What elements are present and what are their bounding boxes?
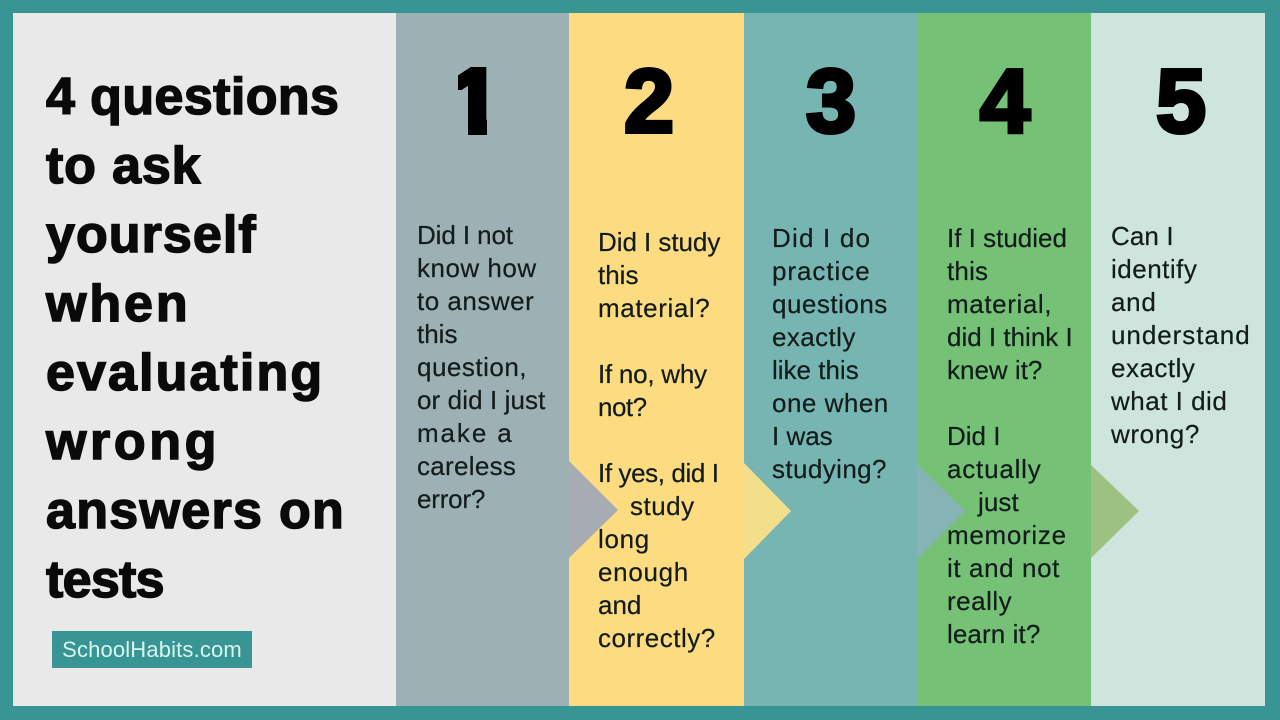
text: question 2: If no, why bbox=[598, 359, 707, 389]
text: question 4: actually bbox=[947, 454, 1042, 484]
title: answers on bbox=[46, 482, 345, 540]
text: question 4 bbox=[947, 223, 1073, 649]
panel: title background bbox=[13, 13, 396, 706]
text: question 5: and bbox=[1111, 287, 1156, 317]
panel: column 4 bbox=[917, 13, 1091, 706]
text: question 3: studying? bbox=[772, 454, 887, 484]
text: question 2: study bbox=[630, 491, 695, 521]
panel: column 3 bbox=[744, 13, 917, 706]
text: question 4: it and not bbox=[947, 553, 1060, 583]
text: question 1: make a bbox=[417, 418, 514, 448]
text: question 5: what I did bbox=[1111, 386, 1227, 416]
text: question 4: Did I bbox=[947, 421, 1000, 451]
title: wrong bbox=[46, 413, 220, 471]
text: question 1: Did I not bbox=[417, 220, 513, 250]
text: question 4: If I studied bbox=[947, 223, 1067, 253]
text: question 1: careless bbox=[417, 451, 516, 481]
number 5: 5 bbox=[1156, 52, 1206, 152]
text: question 1: error? bbox=[417, 484, 485, 514]
title: 4 questions bbox=[46, 68, 339, 126]
text: question 2: correctly? bbox=[598, 623, 716, 653]
text: question 1: question, bbox=[417, 352, 527, 382]
number 2: 2 bbox=[624, 52, 674, 152]
text: question 2: Did I study bbox=[598, 227, 720, 257]
text: question 5: understand bbox=[1111, 320, 1251, 350]
panel: column 1 bbox=[396, 13, 569, 706]
text: question 1 bbox=[417, 220, 546, 514]
text: question 4: memorize bbox=[947, 520, 1067, 550]
text: question 5: wrong? bbox=[1111, 419, 1200, 449]
text: question 2: If yes, did I bbox=[598, 458, 719, 488]
number 1: 1 bbox=[450, 52, 500, 152]
text: question 3: I was bbox=[772, 421, 833, 451]
text: question 4: material, bbox=[947, 289, 1052, 319]
text: question 2: not? bbox=[598, 392, 647, 422]
panel: column 2 bbox=[569, 13, 744, 706]
number 4: 4 bbox=[980, 52, 1030, 152]
title: yourself bbox=[46, 206, 257, 264]
title bbox=[44, 68, 345, 609]
text: question 4: knew it? bbox=[947, 355, 1042, 385]
title: when bbox=[46, 275, 190, 333]
text: question 4: did I think I bbox=[947, 322, 1073, 352]
text: question 4: just bbox=[978, 487, 1019, 517]
text: question 1: to answer bbox=[417, 286, 534, 316]
text: question 4: learn it? bbox=[947, 619, 1040, 649]
text: question 2: long bbox=[598, 524, 650, 554]
badge: SchoolHabits.com bbox=[52, 631, 252, 668]
panel: column 5 bbox=[1091, 13, 1265, 706]
text: question 2: material? bbox=[598, 293, 710, 323]
text: question 5: Can I bbox=[1111, 221, 1174, 251]
text: question 3: Did I do bbox=[772, 223, 871, 253]
text: question 1: know how bbox=[417, 253, 537, 283]
number 3: 3 bbox=[806, 52, 856, 152]
text: question 4: this bbox=[947, 256, 988, 286]
text: question 2: this bbox=[598, 260, 638, 290]
text: question 1: or did I just bbox=[417, 385, 545, 415]
text: question 5: identify bbox=[1111, 254, 1197, 284]
text: question 4: really bbox=[947, 586, 1012, 616]
text: question 2: and bbox=[598, 590, 641, 620]
text: question 3: like this bbox=[772, 355, 859, 385]
text: question 5: exactly bbox=[1111, 353, 1195, 383]
title: tests bbox=[46, 551, 164, 609]
text: question 3: one when bbox=[772, 388, 889, 418]
text: question 3: questions bbox=[772, 289, 888, 319]
text: question 3: exactly bbox=[772, 322, 856, 352]
text: question 3 bbox=[772, 223, 889, 484]
text: question 2: enough bbox=[598, 557, 689, 587]
text: question 5 bbox=[1110, 221, 1251, 449]
title: to ask bbox=[46, 137, 201, 195]
badge: SchoolHabits.com: SchoolHabits.com bbox=[62, 637, 242, 662]
text: question 2 bbox=[598, 227, 720, 653]
title: evaluating bbox=[46, 344, 324, 402]
text: question 3: practice bbox=[772, 256, 871, 286]
text: question 1: this bbox=[417, 319, 457, 349]
